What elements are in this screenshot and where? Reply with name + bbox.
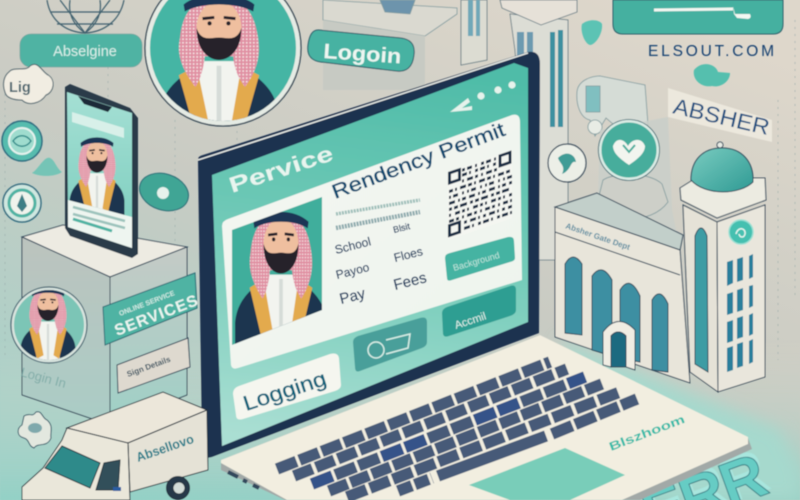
building roof <box>555 193 683 250</box>
phone notch <box>78 96 112 112</box>
phone header bar <box>72 112 124 138</box>
cargo box <box>67 392 208 492</box>
icon: teal ring badge <box>2 121 42 161</box>
machine behind heart icon <box>577 76 648 136</box>
avatar: small circle portrait <box>11 287 87 375</box>
teal droplet right <box>694 64 730 86</box>
building facade <box>555 207 690 383</box>
phone portrait <box>69 136 125 216</box>
permit card <box>222 115 522 373</box>
login badge <box>308 30 414 71</box>
space bar <box>438 436 546 476</box>
blue-tinted keys <box>312 377 585 484</box>
text rows: Pay <box>338 285 368 308</box>
button: fingerprint <box>353 318 427 372</box>
tower left face <box>683 205 718 392</box>
tower emblem <box>729 220 753 244</box>
globe wireframe <box>47 0 124 33</box>
icon: pin badge <box>3 184 41 222</box>
laptop <box>198 52 752 500</box>
text rows: Blsit <box>392 221 411 235</box>
services tag <box>103 273 201 345</box>
teal top-right banner <box>613 0 783 34</box>
laptop screen <box>212 63 528 446</box>
grey label <box>117 338 190 393</box>
logging button: Logging <box>240 367 329 416</box>
cloud label: Lig <box>4 64 53 103</box>
button: top right: Background <box>452 250 501 273</box>
login badge: Logoin <box>323 40 402 68</box>
button: top right <box>445 237 515 281</box>
text rows: School <box>333 234 372 257</box>
logging button <box>233 354 341 420</box>
services tag: ONLINE SERVICE <box>118 290 176 318</box>
delivery truck <box>22 392 208 500</box>
phone info panel <box>68 200 132 248</box>
cab <box>22 428 130 500</box>
ports <box>228 472 259 488</box>
pedestal <box>22 225 187 425</box>
window dots <box>450 81 516 112</box>
top building <box>323 0 457 90</box>
laptop lid <box>198 52 540 458</box>
top tower centre <box>461 0 487 65</box>
site name: ELSOUT.COM <box>648 43 774 60</box>
icon: gear <box>18 412 51 448</box>
button: payment: Accmil <box>453 310 488 332</box>
faint log in text: Login In <box>19 364 68 391</box>
button: payment <box>442 286 516 337</box>
laptop base <box>221 335 752 500</box>
screen heading: Pervice <box>226 141 336 198</box>
small round icon <box>548 144 586 182</box>
trackpad <box>469 448 625 500</box>
text rows: Floes <box>392 244 424 265</box>
wheel <box>166 476 190 500</box>
grey label: Sign Details <box>126 355 172 379</box>
building <box>555 142 766 392</box>
cargo box: Absellovo <box>134 431 196 465</box>
icon: small teal blob <box>32 158 62 176</box>
pale wall behind building <box>597 117 680 250</box>
teal oval button <box>135 167 193 217</box>
dome <box>691 142 753 192</box>
tower right face <box>717 205 765 392</box>
text rows <box>333 200 428 308</box>
tower cap <box>680 178 766 218</box>
base brand text: Blszhoom <box>607 412 687 454</box>
keyboard <box>277 362 637 497</box>
label: Abselgine <box>20 34 142 67</box>
label: Abselgine: Abselgine <box>53 44 117 60</box>
text rows: Payoo <box>334 260 371 282</box>
phone <box>65 84 138 258</box>
absher banner: ABSHER <box>671 94 772 140</box>
permit title: Rendency Permit <box>329 119 509 204</box>
heart badge on pedestal <box>598 120 668 218</box>
cloud label: Lig: Lig <box>9 80 31 96</box>
top avatar portrait <box>144 0 302 128</box>
teal droplet top <box>582 20 602 45</box>
services tag: SERVICES <box>112 292 201 340</box>
QR code <box>448 150 512 240</box>
text rows: Fees <box>392 269 428 294</box>
building facade: Absher Gate Dept <box>564 221 631 252</box>
id photo <box>231 196 323 346</box>
top tower right <box>500 0 577 260</box>
